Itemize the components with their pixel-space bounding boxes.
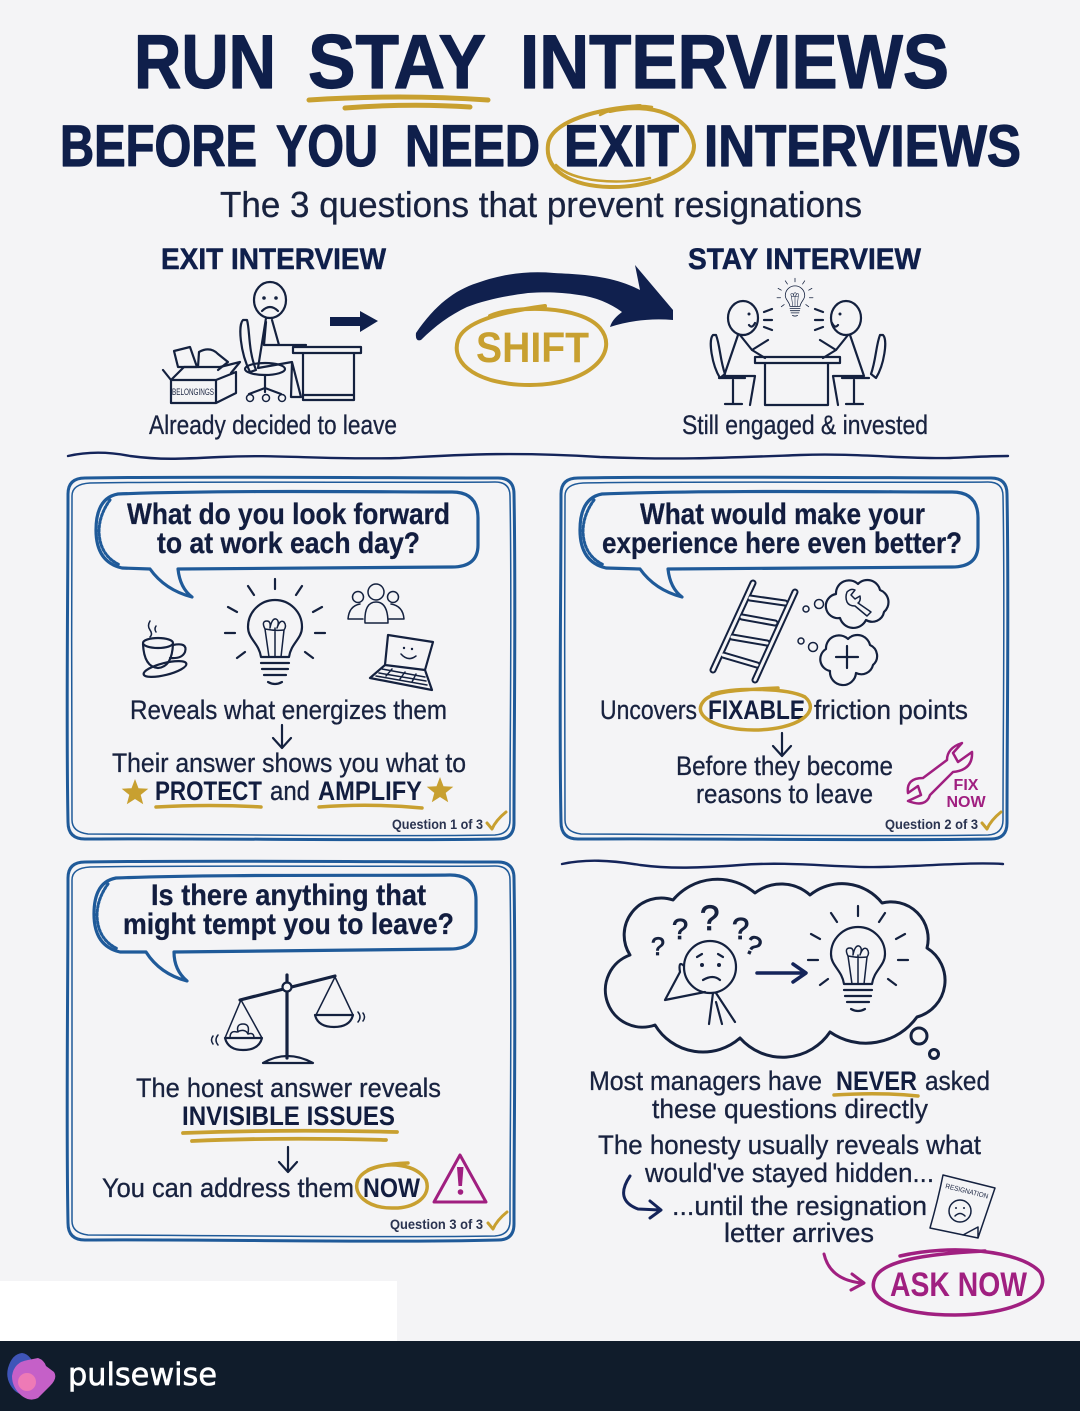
text: most managers: these questions directly bbox=[652, 1094, 929, 1124]
question counter: Question 3 of 3 bbox=[390, 1216, 483, 1232]
logo bbox=[7, 1353, 55, 1400]
text: uncovers fixable friction: FIXABLE bbox=[708, 695, 805, 725]
icon: warning triangle bbox=[434, 1155, 486, 1202]
text: their answer: Their answer shows you what to bbox=[112, 748, 466, 778]
subtitle: The 3 questions that prevent resignations bbox=[220, 184, 862, 225]
icon: thought cloud with wrench bbox=[803, 580, 888, 628]
title: NEED bbox=[405, 114, 540, 179]
icon: thought cloud with plus bbox=[798, 635, 877, 685]
title bbox=[60, 20, 1021, 187]
question text: What would make your bbox=[640, 498, 925, 531]
text: uncovers fixable friction: friction points bbox=[814, 695, 968, 725]
question counter: Question 1 of 3 bbox=[392, 816, 483, 832]
text: protect and amplify: AMPLIFY bbox=[318, 776, 422, 806]
text: protect and amplify: and bbox=[270, 776, 310, 806]
shift badge bbox=[457, 306, 606, 385]
text: honest answer: The honest answer reveals bbox=[136, 1073, 441, 1103]
card border bbox=[67, 861, 515, 1241]
card border bbox=[560, 477, 1008, 840]
icon: resignation letter: RESIGNATION bbox=[945, 1183, 989, 1201]
panel: question 1 bbox=[67, 477, 515, 840]
text: most managers: NEVER bbox=[836, 1066, 917, 1096]
text: uncovers fixable friction: Uncovers bbox=[600, 695, 697, 725]
arrow: shift bbox=[416, 265, 673, 340]
question counter: Question 2 of 3 bbox=[885, 816, 978, 832]
text: honesty: ...until the resignation bbox=[672, 1191, 927, 1221]
icon: fix now wrench bbox=[908, 743, 986, 811]
arrow: exit door bbox=[330, 311, 378, 332]
title: STAY bbox=[308, 20, 486, 105]
icon: confused person bbox=[665, 941, 736, 1024]
panel: closing message bbox=[589, 879, 1043, 1315]
question marks: ? bbox=[732, 911, 749, 946]
icon: resignation letter bbox=[930, 1175, 995, 1238]
arrow: to ask now bbox=[824, 1254, 864, 1290]
text: most managers: Most managers have bbox=[589, 1066, 822, 1096]
question marks: ? bbox=[672, 914, 688, 946]
title: BEFORE bbox=[60, 114, 257, 179]
text: most managers: asked bbox=[925, 1066, 990, 1096]
text: you can address them now bbox=[102, 1163, 427, 1208]
arrow: down bbox=[279, 1147, 297, 1172]
question counter bbox=[390, 1212, 507, 1232]
heading: exit interview: EXIT INTERVIEW bbox=[161, 243, 387, 276]
icon: coffee cup bbox=[142, 621, 188, 680]
arrow: curved to resignation bbox=[624, 1176, 661, 1218]
icon: smiling laptop bbox=[370, 635, 433, 690]
panel: question 2: reasons to leave bbox=[696, 779, 873, 809]
text: you can address them now: NOW bbox=[363, 1173, 420, 1203]
text: honesty: letter arrives bbox=[724, 1218, 874, 1248]
text: honesty: The honesty usually reveals what bbox=[598, 1130, 982, 1160]
thought cloud bbox=[605, 879, 945, 1058]
speech bubble bbox=[94, 875, 476, 981]
speech bubble: to at work each day? bbox=[157, 527, 420, 560]
text: most managers bbox=[589, 1066, 990, 1124]
icon: sad person at desk with box bbox=[163, 282, 361, 403]
text: reveals: Reveals what energizes them bbox=[130, 695, 447, 725]
caption: already decided: Already decided to leave bbox=[149, 410, 397, 440]
question marks: ? bbox=[740, 929, 766, 963]
icon: two people talking at a table bbox=[711, 278, 885, 405]
icon: balance scale bbox=[212, 975, 364, 1063]
circle: exit bbox=[548, 106, 694, 187]
question marks bbox=[651, 899, 766, 963]
icon: team bbox=[348, 584, 404, 623]
text: you can address them now: You can address them bbox=[102, 1173, 354, 1203]
text: invisible issues: INVISIBLE ISSUES bbox=[182, 1101, 395, 1131]
caption: still engaged: Still engaged & invested bbox=[682, 410, 928, 440]
panel: question 2 bbox=[560, 477, 1008, 840]
title: RUN bbox=[134, 20, 276, 105]
speech bubble bbox=[96, 492, 478, 597]
badge: ask now: ASK NOW bbox=[890, 1266, 1028, 1304]
text: honesty: would've stayed hidden... bbox=[644, 1158, 934, 1188]
panel: exit interview bbox=[149, 243, 397, 440]
question text: Is there anything that bbox=[151, 879, 426, 912]
arrow: down bbox=[773, 733, 791, 756]
panel: stay interview bbox=[682, 243, 928, 440]
speech bubble: might tempt you to leave? bbox=[123, 908, 454, 941]
badge: ask now bbox=[873, 1250, 1043, 1315]
title: YOU bbox=[276, 114, 378, 179]
arrow: down bbox=[273, 725, 291, 748]
underline: stay bbox=[309, 97, 488, 108]
arrow: to idea bbox=[757, 964, 806, 982]
text: protect and amplify: PROTECT bbox=[155, 776, 262, 806]
icon: sad person at desk with box: BELONGINGS bbox=[172, 387, 214, 397]
icon: star left bbox=[122, 779, 148, 804]
card border bbox=[67, 477, 515, 840]
heading: stay interview: STAY INTERVIEW bbox=[688, 243, 922, 276]
footer bar bbox=[0, 1341, 1080, 1411]
text: honesty bbox=[598, 1130, 982, 1248]
title: EXIT bbox=[564, 114, 679, 179]
icon: star right bbox=[427, 777, 453, 802]
icon: ladder bbox=[713, 583, 795, 680]
question marks: ? bbox=[700, 899, 719, 938]
panel: question 3 bbox=[67, 861, 515, 1241]
speech bubble: experience here even better? bbox=[602, 527, 962, 560]
shift badge: SHIFT bbox=[476, 324, 589, 372]
icon: fix now wrench: NOW bbox=[946, 794, 986, 811]
text: before they become: Before they become bbox=[676, 751, 893, 781]
question text: What do you look forward bbox=[127, 498, 450, 531]
text: protect and amplify bbox=[155, 776, 422, 808]
text: uncovers fixable friction bbox=[600, 688, 968, 730]
speech bubble bbox=[580, 492, 978, 597]
title: INTERVIEWS bbox=[704, 114, 1021, 179]
icon: lightbulb bbox=[225, 579, 325, 684]
title: INTERVIEWS bbox=[520, 20, 949, 105]
white strip bbox=[0, 1281, 397, 1341]
question counter bbox=[885, 812, 1001, 832]
brand name: pulsewise bbox=[68, 1357, 217, 1393]
icon: lightbulb bbox=[808, 906, 908, 1011]
question marks: ? bbox=[651, 933, 665, 961]
icon: fix now wrench: FIX bbox=[954, 777, 979, 794]
